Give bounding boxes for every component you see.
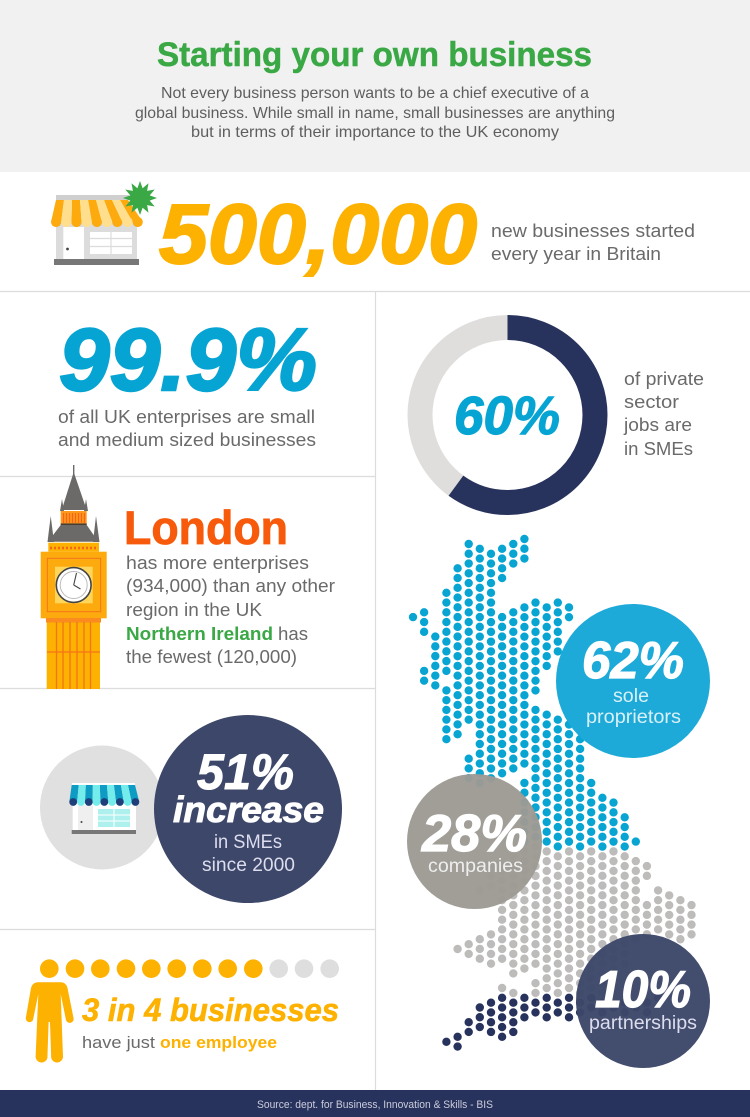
header panel [0,0,750,172]
callout: 62% sole proprietors: proprietors [586,707,681,728]
callout: 10% partnerships: partnerships [589,1013,697,1034]
text: private sector jobs: jobs are [623,415,692,435]
text: new businesses: new businesses started [491,221,695,241]
intro text: global business. While small in name, small businesses are anything [135,105,615,122]
icon: Big Ben [41,465,107,689]
text: have just one employee: one employee [160,1033,277,1052]
text: private sector jobs: sector [624,392,679,412]
callout: 28% companies [407,774,542,909]
map region: blue [413,539,636,847]
pictogram: row of dots [40,959,339,978]
text: private sector jobs: of private [624,369,704,389]
text: enterprises by region: Northern Ireland [126,624,273,644]
text: enterprises by region: the fewest (120,000) [126,647,297,667]
text: have just one employee [82,1033,277,1052]
callout: 10% partnerships: 10% [595,961,691,1019]
donut value: 60% [454,386,560,446]
text: enterprises by region: has [278,624,308,644]
text: enterprises by region: region in the UK [126,600,262,620]
callout: 62% sole proprietors: 62% [582,632,684,690]
callout: 28% companies: 28% [421,805,527,863]
callout: 51% increase: since 2000 [202,855,295,876]
callout: 51% increase: in SMEs [214,832,282,853]
text: have just one employee: have just [82,1033,155,1052]
text: all UK enterprises: and medium sized businesses [58,430,316,450]
text: all UK enterprises [58,407,316,450]
text: private sector jobs: in SMEs [624,439,693,459]
statistic: 500,000: 500,000 [159,187,477,281]
icon: grey circle with blue shop [40,746,164,870]
statistic: 99.9%: 99.9% [59,310,317,409]
text: private sector jobs [623,369,704,459]
map region: navy [446,998,658,1047]
intro text [135,85,615,141]
dot map of the UK [413,539,692,1047]
intro text: but in terms of their importance to the UK economy [191,124,559,141]
text: new businesses: every year in Britain [491,244,661,264]
callout: 51% increase [154,715,342,903]
text: enterprises by region [126,553,335,667]
text: all UK enterprises: of all UK enterprises are small [58,407,315,427]
callout: 28% companies: companies [428,856,523,877]
donut chart: 60% [420,328,595,502]
source text: Source: dept. for Business, Innovation & Skills - BIS [257,1099,493,1111]
text: enterprises by region: (934,000) than any other [126,576,335,596]
intro text: Not every business person wants to be a chief executive of a [161,85,589,102]
footer bar [0,1090,750,1117]
callout: 51% increase: 51% [197,744,294,800]
text: new businesses [491,221,695,264]
title: Starting your own business [157,36,592,74]
callout: 10% partnerships [576,934,710,1068]
heading: London: London [124,501,288,554]
map region: grey [458,847,692,993]
icon: person [26,982,74,1063]
callout: 51% increase: increase [173,789,324,830]
icon: shop with green burst [51,181,157,265]
text: enterprises by region: has more enterprises [126,553,309,573]
callout: 62% sole proprietors [556,604,710,758]
heading: 3 in 4 businesses: 3 in 4 businesses [82,992,339,1028]
callout: 62% sole proprietors: sole [613,686,649,707]
